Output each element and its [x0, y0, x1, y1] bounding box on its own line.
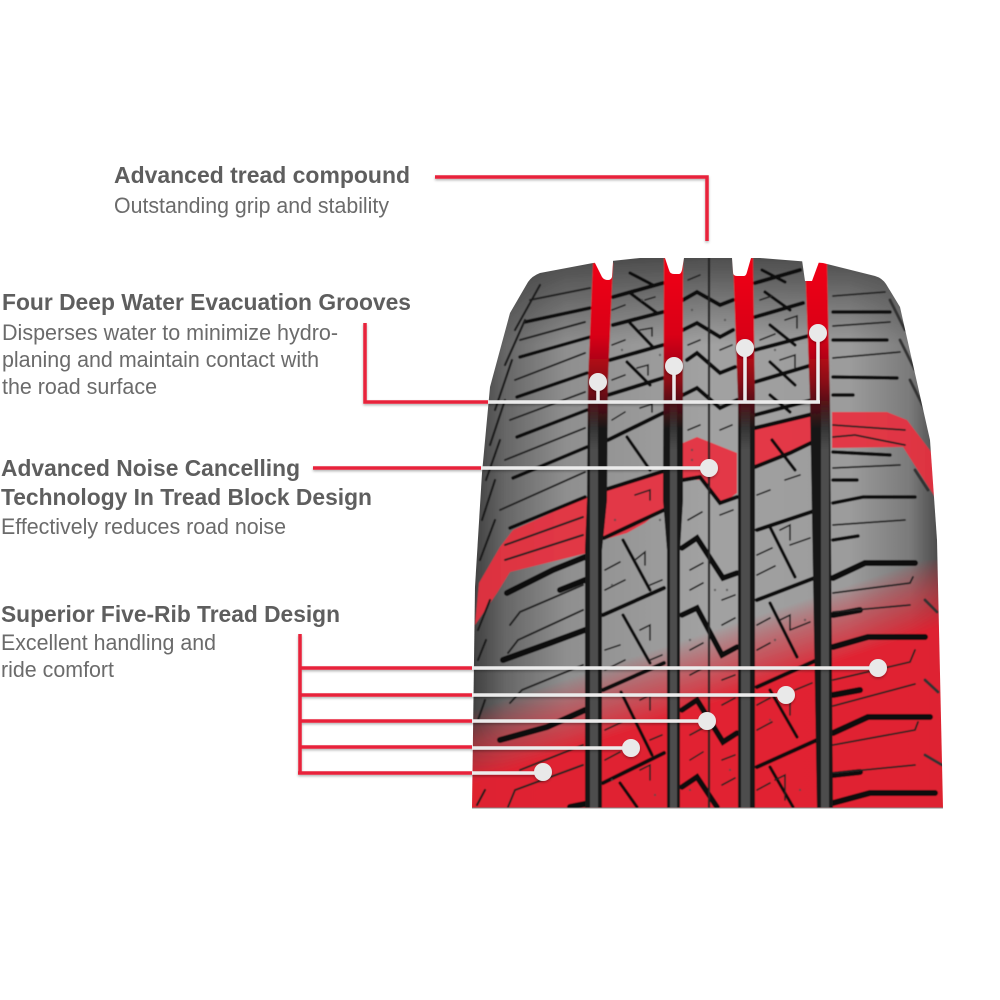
text: advanced tread compound: Advanced tread compound: [114, 162, 410, 188]
text: four deep water evacuation grooves: Disperses water to minimize hydro-: [2, 320, 338, 345]
text: four deep water evacuation grooves: Four Deep Water Evacuation Grooves: [2, 289, 411, 315]
text: advanced noise cancelling technology: Advanced Noise Cancelling: [1, 455, 300, 481]
text: advanced noise cancelling technology: [1, 455, 372, 539]
callout: water evacuation grooves leader: [365, 323, 827, 402]
text: four deep water evacuation grooves: the road surface: [2, 374, 157, 399]
groove top notches: [595, 250, 819, 281]
red noise-cancelling band: [475, 412, 935, 625]
callout: five-rib design leader: [298, 634, 887, 781]
tread pin dots: [611, 299, 806, 796]
text: advanced tread compound: [114, 162, 410, 218]
text: superior five-rib tread design: Excellent handling and: [1, 630, 216, 655]
callout: advanced tread compound leader: [435, 177, 707, 241]
callout: noise cancelling leader: [313, 459, 718, 477]
water grooves: [585, 258, 833, 808]
rib 2 blocks: [603, 273, 667, 807]
text: advanced tread compound: Outstanding grip and stability: [114, 193, 389, 218]
text: advanced noise cancelling technology: Technology In Tread Block Design: [1, 484, 372, 510]
rib 4 blocks: [755, 270, 817, 807]
tire tread image: [465, 250, 950, 810]
right shoulder slots: [833, 292, 942, 803]
text: four deep water evacuation grooves: [2, 289, 411, 399]
crown shading: [506, 258, 904, 342]
center rib chevrons: [682, 258, 737, 808]
tire base edge: [472, 807, 943, 809]
text: superior five-rib tread design: ride comfort: [1, 657, 114, 682]
text: superior five-rib tread design: [1, 601, 340, 682]
tire base: [465, 250, 950, 810]
left shoulder slots: [477, 285, 590, 807]
text: advanced noise cancelling technology: Effectively reduces road noise: [1, 514, 286, 539]
text: superior five-rib tread design: Superior Five-Rib Tread Design: [1, 601, 340, 627]
red five-rib fade region: [465, 560, 950, 810]
text: four deep water evacuation grooves: planing and maintain contact with: [2, 347, 319, 372]
